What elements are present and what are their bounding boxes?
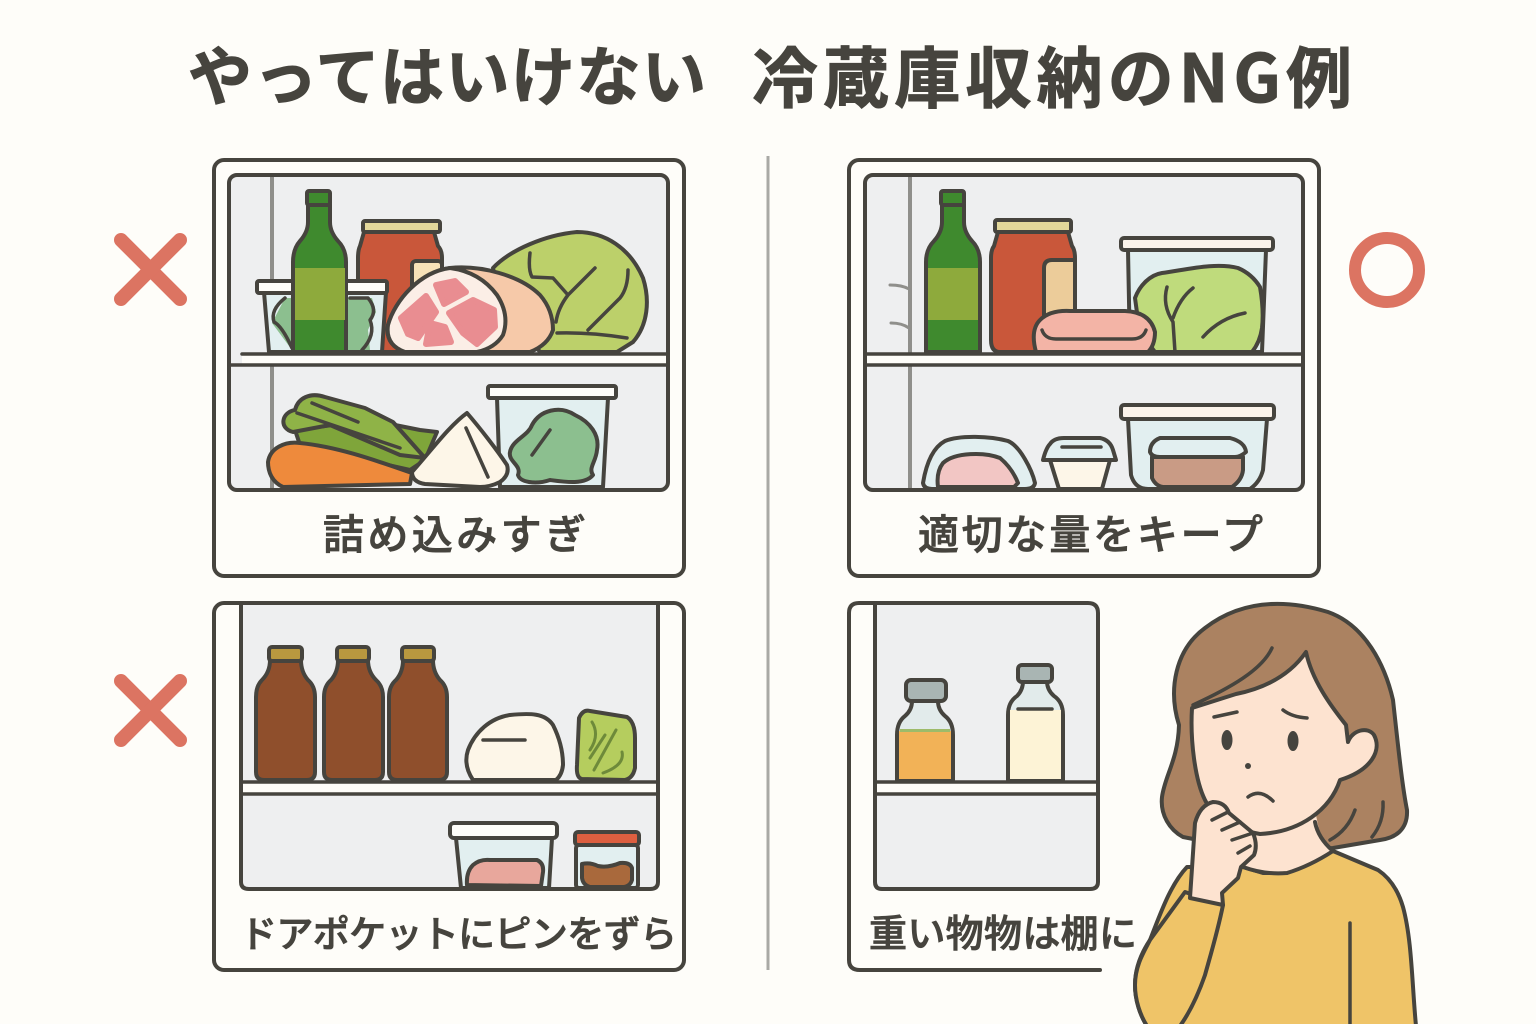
arm sleeve (1135, 892, 1223, 1024)
milk bottle (1008, 665, 1063, 780)
juice bottle (897, 680, 953, 780)
face (1192, 652, 1377, 834)
food container with leaf (488, 386, 616, 487)
icon: cross mark, bottom row (121, 681, 180, 740)
carrot (268, 443, 412, 487)
cabbage piece (577, 711, 635, 780)
leafy greens (283, 395, 437, 470)
ham (388, 267, 553, 352)
tomato jar (358, 221, 442, 352)
meat container (450, 823, 557, 888)
three brown bottles (256, 647, 447, 780)
caption: overpacked: 詰め込みすぎ (323, 512, 586, 558)
icon: cross mark, top row (121, 240, 180, 299)
icon: circle mark (1355, 238, 1419, 302)
sauce jar (575, 832, 639, 888)
panel: heavy items on shelf (849, 603, 1137, 970)
bangs (1193, 648, 1272, 705)
title (188, 26, 1352, 122)
green bottle (926, 191, 980, 352)
green bottle (293, 191, 346, 352)
wrapped meat (923, 437, 1035, 489)
food container with bowl (1121, 405, 1274, 489)
container with greens behind bottle (257, 281, 387, 352)
eyes and brows (1214, 710, 1307, 801)
small cup (1043, 438, 1116, 489)
panel: proper amount fridge (849, 160, 1319, 576)
cabbage (493, 232, 647, 352)
title: 冷蔵庫収納のNG例 (752, 26, 1352, 122)
panel: door pocket (214, 603, 684, 970)
caption: heavy items: 重い物物は棚に (869, 914, 1137, 956)
title: やってはいけない (188, 27, 706, 119)
sweater (1135, 851, 1416, 1024)
food container with cabbage (1121, 238, 1273, 352)
hand (1190, 802, 1256, 905)
sleeve line (1348, 923, 1352, 1024)
white radish wedge (412, 413, 508, 487)
caption: door pocket: ドアポケットにピンをずら (240, 914, 677, 955)
neck (1240, 810, 1333, 873)
center divider (766, 156, 770, 970)
hair (1162, 604, 1407, 850)
hair strands (1330, 802, 1383, 840)
illustration: worried woman (1135, 604, 1416, 1024)
tomato jar (991, 220, 1075, 352)
white food (466, 714, 563, 780)
panel: overpacked fridge (214, 160, 684, 576)
ham slab (1034, 311, 1155, 352)
caption: proper amount: 適切な量をキープ (918, 512, 1263, 558)
